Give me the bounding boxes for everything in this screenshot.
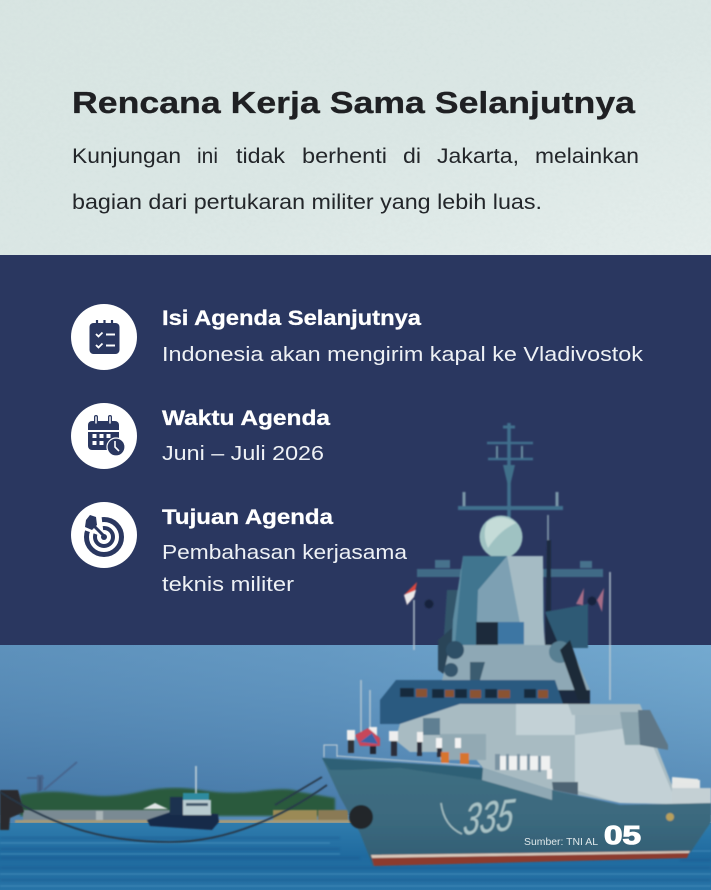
intro text block: di bbox=[403, 145, 421, 168]
deck railing bbox=[324, 745, 480, 766]
heading: Waktu Agenda bbox=[162, 406, 331, 430]
mooring post bbox=[0, 790, 24, 830]
anchor bbox=[349, 805, 373, 829]
panel: navy agenda background bbox=[0, 255, 711, 645]
description bbox=[162, 541, 408, 596]
intro text block: Kunjungan bbox=[72, 145, 181, 168]
hull number: 335 bbox=[461, 791, 517, 845]
item: tujuan agenda bbox=[71, 502, 408, 596]
tower bbox=[450, 556, 545, 690]
panel: paper header background bbox=[0, 0, 711, 255]
bridge band bbox=[380, 680, 563, 724]
item: isi agenda bbox=[71, 304, 644, 370]
antenna lines and flags bbox=[361, 515, 610, 735]
intro text block: melainkan bbox=[535, 145, 639, 168]
description: teknis militer bbox=[162, 573, 294, 596]
mast bbox=[458, 423, 563, 525]
title: Rencana Kerja Sama Selanjutnya bbox=[72, 86, 636, 120]
heading: Tujuan Agenda bbox=[162, 505, 334, 529]
intro text block: berhenti bbox=[302, 145, 387, 168]
item: waktu agenda bbox=[71, 403, 331, 469]
description: Indonesia akan mengirim kapal ke Vladivostok bbox=[162, 343, 644, 366]
tugboat bbox=[147, 766, 219, 830]
intro text block: Jakarta, bbox=[437, 145, 519, 168]
icon: target with arrow bbox=[71, 502, 137, 568]
mooring ropes bbox=[0, 777, 327, 842]
intro text block bbox=[72, 145, 639, 214]
photo: warship bbox=[322, 423, 711, 866]
intro text block: tidak bbox=[236, 145, 286, 168]
side machinery bbox=[443, 590, 462, 680]
tree line bbox=[20, 788, 335, 816]
superstructure bbox=[395, 704, 672, 804]
photo: harbour background bbox=[0, 645, 711, 890]
crane bbox=[27, 762, 77, 792]
intro text block: bagian dari pertukaran militer yang lebih luas. bbox=[72, 191, 542, 214]
water bbox=[0, 823, 711, 890]
heading: Isi Agenda Selanjutnya bbox=[162, 306, 422, 330]
boot topping bbox=[371, 851, 690, 866]
radar dome bbox=[480, 516, 522, 558]
icon: checklist calendar bbox=[71, 304, 137, 370]
side arms bbox=[417, 569, 464, 577]
rear tower bbox=[545, 540, 590, 705]
hull bbox=[322, 758, 711, 866]
lower tower bbox=[440, 645, 590, 690]
crew on deck bbox=[347, 727, 698, 795]
icon: calendar with clock bbox=[71, 403, 137, 469]
description: Pembahasan kerjasama bbox=[162, 541, 408, 564]
page number: 05 bbox=[604, 822, 641, 850]
rear deck bbox=[672, 788, 711, 804]
intro text block: ini bbox=[197, 145, 218, 168]
description: Juni – Juli 2026 bbox=[162, 442, 324, 465]
sea wall bbox=[15, 803, 365, 823]
source credit: Sumber: TNI AL bbox=[524, 836, 598, 848]
